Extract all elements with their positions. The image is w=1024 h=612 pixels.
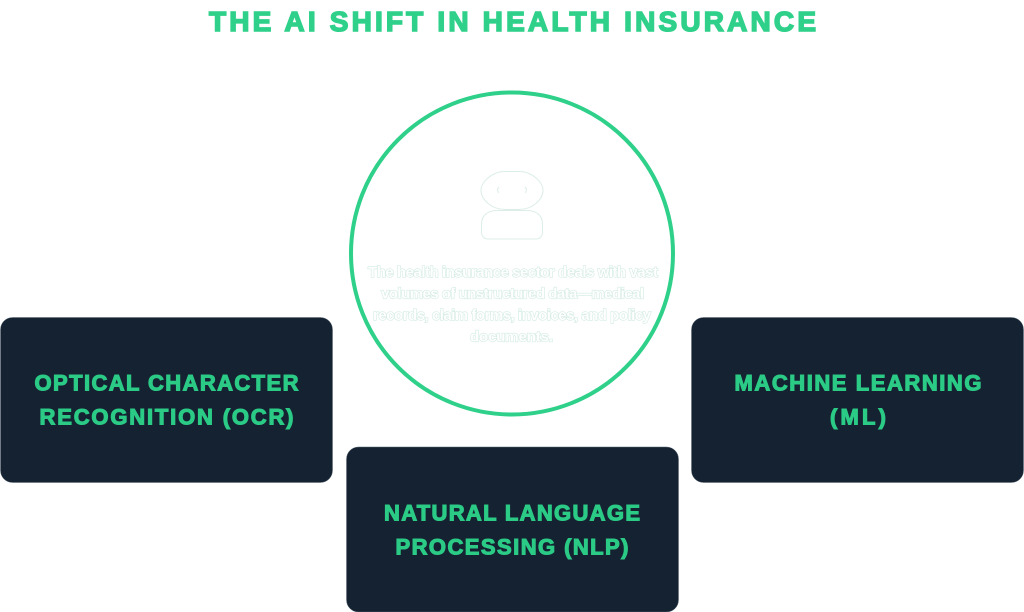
panel: ML card <box>692 318 1024 482</box>
description text: records, claim forms, invoices, and policy <box>373 307 652 324</box>
OCR label: OPTICAL CHARACTER <box>34 370 299 396</box>
ML label: (ML) <box>830 404 886 430</box>
title: THE AI SHIFT IN HEALTH INSURANCE <box>209 6 816 37</box>
panel: central circle <box>351 92 673 414</box>
description text: volumes of unstructured data—medical <box>381 286 644 302</box>
NLP label: NATURAL LANGUAGE <box>384 500 640 526</box>
ML label: MACHINE LEARNING <box>734 370 982 396</box>
panel: OCR card <box>0 318 332 482</box>
ML label <box>734 370 982 430</box>
panel: NLP card <box>346 447 678 612</box>
OCR label <box>34 370 299 430</box>
description text <box>368 264 658 346</box>
description text: The health insurance sector deals with vast <box>368 264 658 281</box>
NLP label: PROCESSING (NLP) <box>396 534 628 560</box>
description text: documents. <box>470 328 553 346</box>
icon: robot <box>481 172 543 239</box>
NLP label <box>384 500 640 560</box>
OCR label: RECOGNITION (OCR) <box>40 404 294 430</box>
circle outline <box>351 92 673 414</box>
